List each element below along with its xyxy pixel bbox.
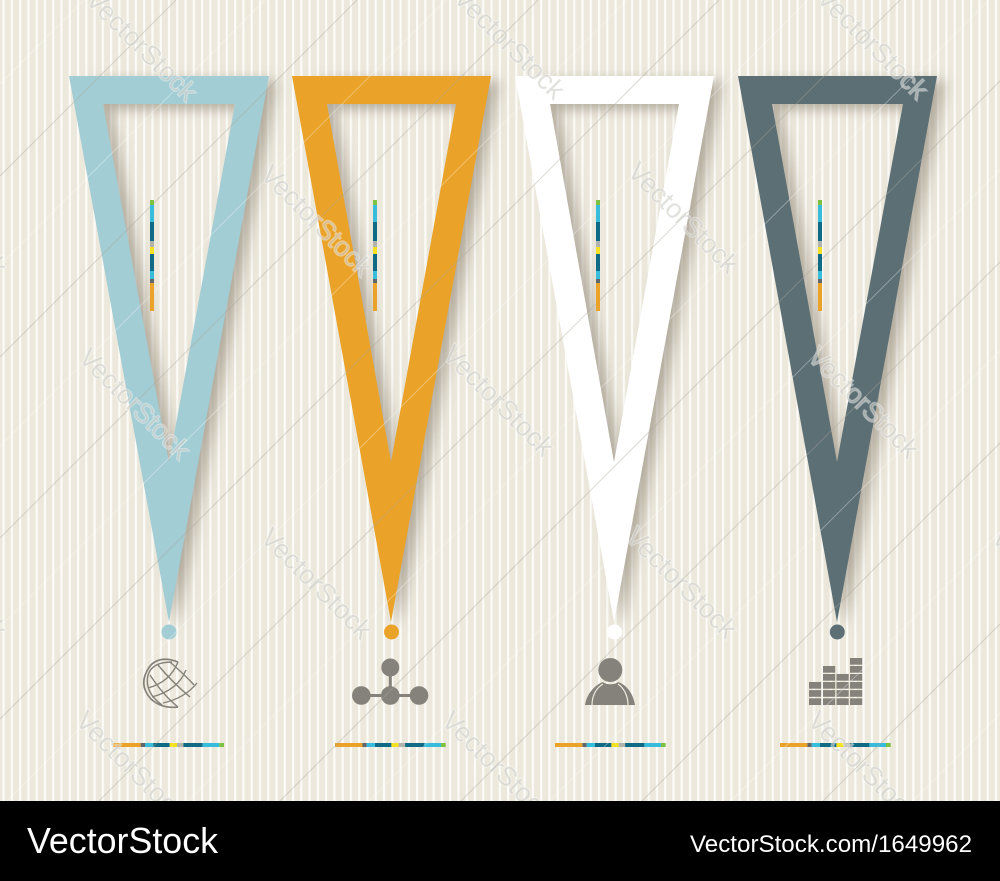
icon: globe [144, 659, 197, 707]
panel: orange triangle [292, 76, 491, 747]
white horizontal colour bar [555, 743, 666, 747]
panel: white triangle [515, 76, 714, 747]
watermarks: VectorStock [73, 342, 196, 466]
vertical colour bars [150, 200, 822, 311]
orange dot [384, 624, 399, 640]
watermarks: VectorStock [622, 156, 745, 280]
footer bar [0, 801, 1000, 881]
orange ribbon [292, 76, 491, 622]
watermarks: VectorStock [620, 521, 743, 645]
blue horizontal colour bar [113, 743, 224, 747]
watermarks: VectorStock [70, 705, 193, 829]
icon: person [585, 658, 635, 705]
icon: network nodes [352, 658, 428, 705]
watermarks: VectorStock [802, 341, 925, 465]
watermarks: VectorStock [255, 159, 378, 283]
orange horizontal colour bar [335, 743, 446, 747]
blue ribbon [69, 76, 269, 622]
blue dot [162, 624, 176, 640]
icon: bar chart blocks [809, 658, 862, 705]
watermarks: VectorStock [436, 705, 559, 829]
footer brand name: VectorStock [27, 820, 219, 861]
slate dot [830, 624, 845, 640]
slate ribbon [738, 76, 937, 622]
white dot [607, 624, 622, 640]
footer image id: VectorStock.com/1649962 [690, 831, 972, 858]
watermarks: VectorStock [255, 522, 378, 646]
panel: blue triangle [69, 76, 269, 747]
soft paper shadows [93, 81, 945, 627]
panel: slate triangle [738, 76, 937, 747]
watermarks: VectorStock [437, 339, 560, 463]
white ribbon [515, 76, 714, 622]
watermarks: VectorStock [802, 705, 925, 829]
slate horizontal colour bar [780, 743, 891, 747]
